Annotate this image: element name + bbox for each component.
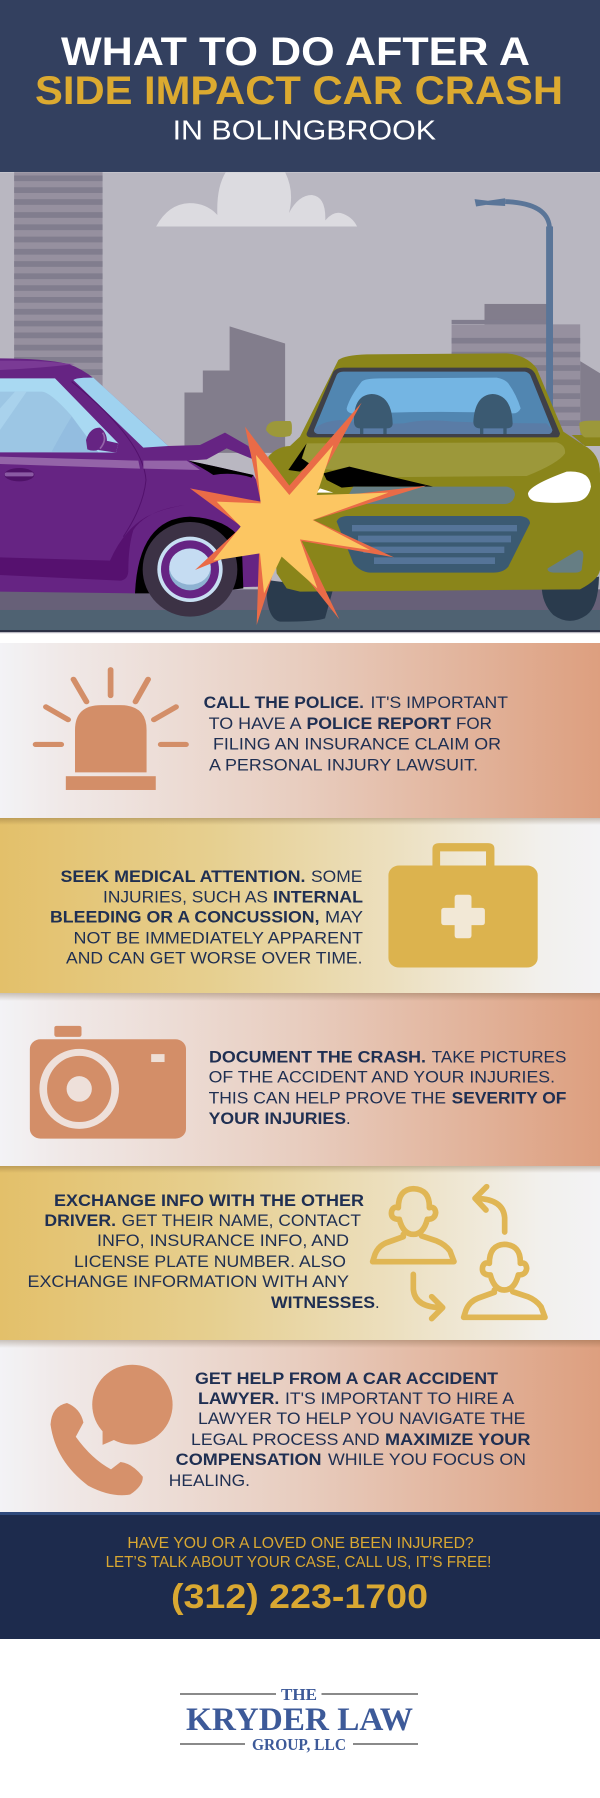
windshield [73, 378, 168, 448]
text: call the police: FOR [456, 714, 492, 733]
wheel [143, 522, 237, 617]
logo: the kryder law group: KRYDER LAW [186, 1702, 413, 1738]
panel: document the crash [0, 993, 600, 1166]
text: seek medical attention: NOT BE IMMEDIATELY APPARENT [74, 928, 363, 948]
logo: the kryder law group [180, 1685, 418, 1754]
text: call the police: CALL THE POLICE. [204, 693, 364, 712]
text: document the crash: OF THE ACCIDENT AND YOUR INJURIES. [209, 1068, 555, 1086]
purple car [0, 358, 267, 617]
text: call the police [204, 693, 508, 774]
text: seek medical attention: SEEK MEDICAL ATTENTION. [60, 867, 306, 886]
text: call the police: TO HAVE A [209, 714, 303, 733]
side windows [0, 378, 118, 453]
panel: exchange info [0, 1166, 600, 1340]
logo: the kryder law group: GROUP, LLC [252, 1735, 346, 1754]
cloud [156, 172, 357, 226]
text: exchange info: WITNESSES [271, 1293, 375, 1312]
text: get help from a lawyer: WHILE YOU FOCUS ON [328, 1450, 526, 1469]
tyres [266, 577, 599, 622]
text: seek medical attention: INTERNAL [273, 888, 363, 906]
text: document the crash: THIS CAN HELP PROVE THE [209, 1088, 446, 1108]
title line 1: WHAT TO DO AFTER A [61, 30, 530, 74]
building: right [452, 304, 600, 445]
text: get help from a lawyer [169, 1369, 530, 1490]
text: document the crash: DOCUMENT THE CRASH. [209, 1048, 426, 1066]
subtitle: IN BOLINGBROOK [173, 114, 436, 146]
wheel arch [135, 517, 243, 593]
grille [337, 516, 530, 573]
text: call the police: FILING AN INSURANCE CLAIM OR [213, 734, 501, 754]
call to action text [106, 1535, 491, 1571]
call to action text: HAVE YOU OR A LOVED ONE BEEN INJURED? [127, 1535, 474, 1552]
text: exchange info: EXCHANGE INFO WITH THE OTHER [54, 1191, 364, 1210]
text: seek medical attention: INJURIES, SUCH AS [103, 888, 268, 906]
call to action band [0, 1512, 600, 1639]
text: exchange info: DRIVER. [44, 1211, 116, 1230]
text: seek medical attention: BLEEDING OR A CONCUSSION, [50, 908, 320, 926]
icon: first aid kit [388, 843, 538, 968]
text: get help from a lawyer: HEALING. [169, 1471, 250, 1490]
door handle [4, 468, 34, 481]
text: exchange info: GET THEIR NAME, CONTACT [122, 1211, 361, 1230]
text: get help from a lawyer: LEGAL PROCESS AND [191, 1430, 380, 1449]
phone number: (312) 223-1700 [171, 1578, 428, 1616]
crumple [188, 461, 253, 478]
text: exchange info: . [375, 1293, 380, 1312]
text: document the crash: . [346, 1109, 351, 1128]
crumple [288, 443, 433, 493]
text: seek medical attention [50, 867, 363, 968]
panel: seek medical attention [0, 818, 600, 993]
call to action text: LET’S TALK ABOUT YOUR CASE, CALL US, IT’S FREE! [106, 1554, 491, 1571]
text: call the police: POLICE REPORT [306, 714, 451, 733]
road [0, 589, 600, 632]
windshield [307, 368, 560, 437]
icon: siren [36, 670, 186, 790]
city background [0, 172, 600, 633]
building: left tower [14, 172, 103, 390]
text: seek medical attention: SOME [311, 867, 362, 886]
street lamp [475, 198, 553, 414]
headrests [354, 394, 513, 434]
text: seek medical attention: AND CAN GET WORSE OVER TIME. [66, 948, 362, 968]
illustration: car crash scene [0, 172, 600, 633]
text: exchange info [28, 1191, 380, 1312]
text: seek medical attention: MAY [325, 908, 363, 926]
sill shadow [0, 505, 185, 581]
text: document the crash: TAKE PICTURES [432, 1048, 566, 1066]
logo: the kryder law group: THE [281, 1685, 317, 1704]
side mirror [86, 428, 118, 453]
title line 2: SIDE IMPACT CAR CRASH [35, 69, 563, 113]
text: exchange info: EXCHANGE INFORMATION WITH ANY [28, 1272, 349, 1291]
building: middle [184, 326, 285, 453]
text: get help from a lawyer: GET HELP FROM A CAR ACCIDENT [195, 1369, 498, 1388]
impact starburst [190, 403, 427, 625]
icon: phone and speech bubble [51, 1365, 173, 1495]
body [268, 353, 600, 592]
panel: get help from a lawyer [0, 1340, 600, 1512]
panel: call the police [0, 643, 600, 818]
icon: two people exchanging [373, 1187, 545, 1319]
text: document the crash [209, 1048, 566, 1128]
left mirror [266, 421, 292, 437]
right mirror [572, 421, 600, 446]
fog lamp [548, 550, 583, 573]
text: document the crash: YOUR INJURIES [209, 1109, 346, 1128]
text: get help from a lawyer: COMPENSATION [176, 1450, 322, 1469]
text: call the police: IT'S IMPORTANT [370, 693, 508, 712]
text: call the police: A PERSONAL INJURY LAWSUIT. [209, 756, 478, 774]
header [0, 0, 600, 172]
text: document the crash: SEVERITY OF [452, 1088, 566, 1108]
text: get help from a lawyer: LAWYER TO HELP YOU NAVIGATE THE [198, 1409, 525, 1428]
text: get help from a lawyer: MAXIMIZE YOUR [385, 1430, 530, 1449]
headlight [528, 472, 591, 503]
text: get help from a lawyer: IT'S IMPORTANT TO HIRE A [285, 1389, 515, 1408]
text: exchange info: LICENSE PLATE NUMBER. ALSO [74, 1252, 346, 1271]
grey bar [343, 487, 515, 504]
door line [72, 382, 146, 537]
body highlight strip [0, 457, 200, 470]
text: exchange info: INFO, INSURANCE INFO, AND [97, 1231, 349, 1250]
icon: camera [30, 1026, 186, 1139]
hood [300, 442, 565, 477]
olive car [266, 353, 600, 622]
text: get help from a lawyer: LAWYER. [198, 1389, 279, 1408]
